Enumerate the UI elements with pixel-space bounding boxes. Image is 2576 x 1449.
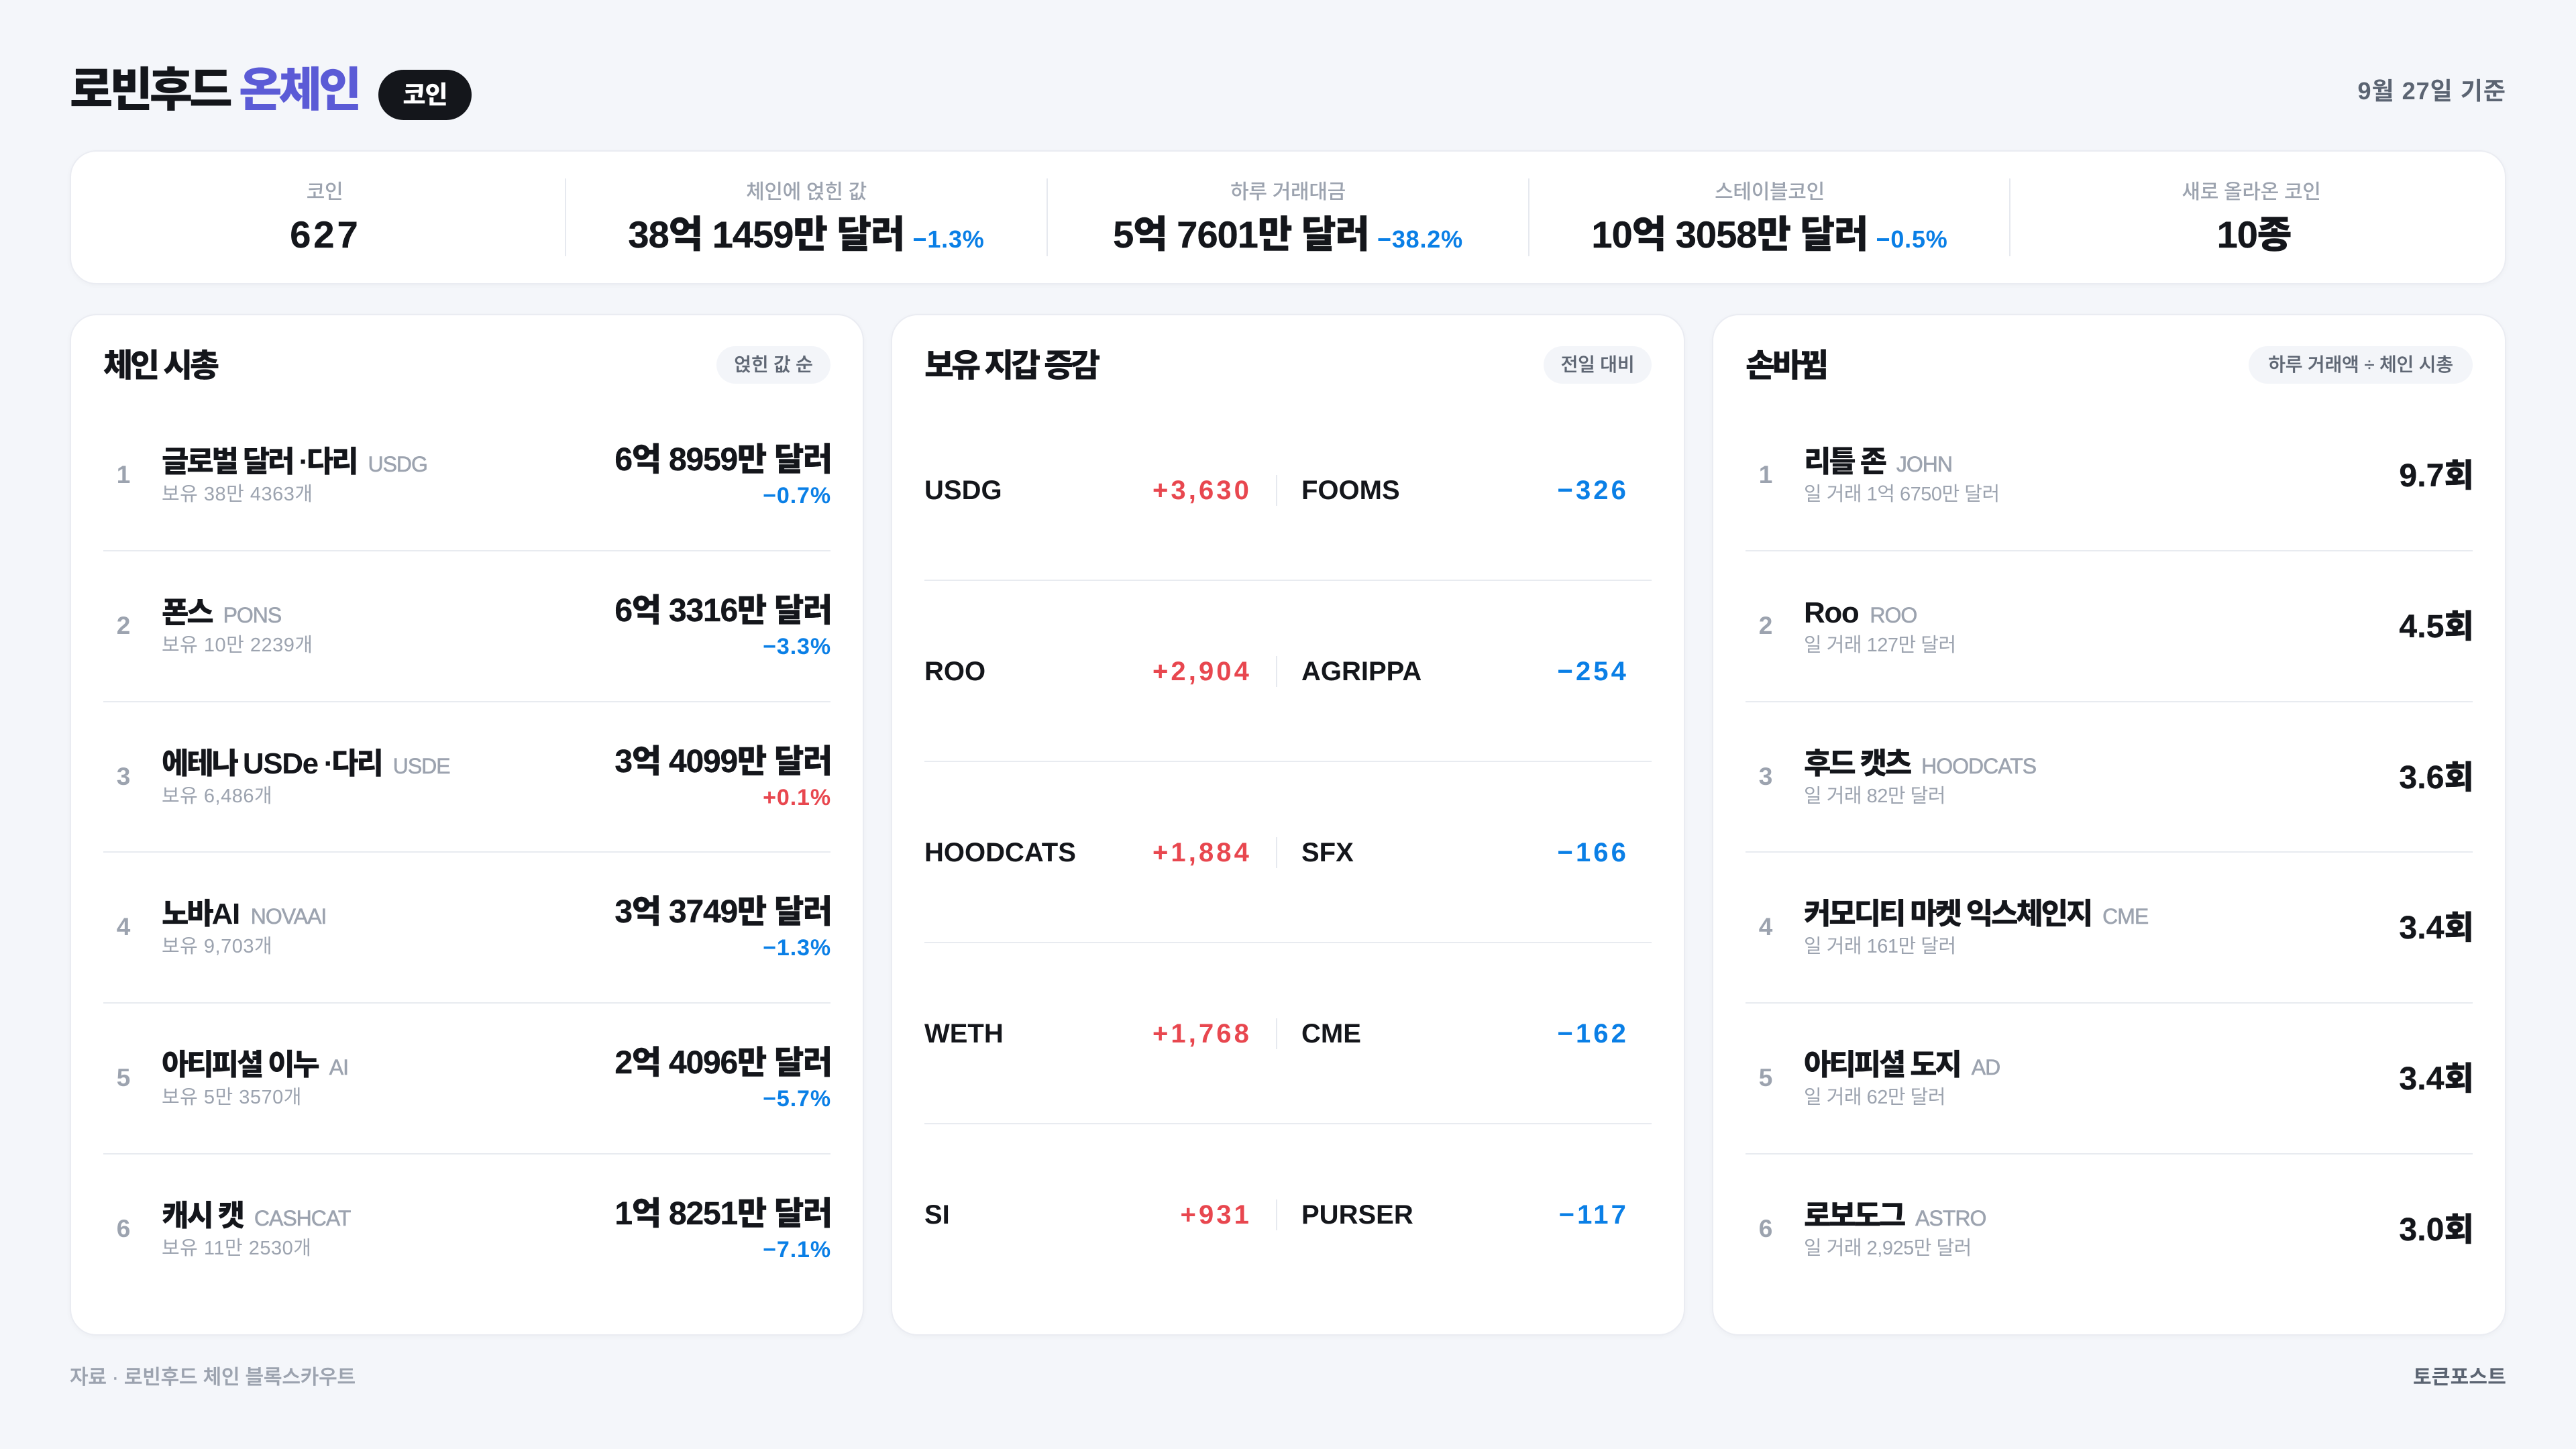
panel: summary stats: 하루 거래대금 xyxy=(1230,181,1346,203)
panel: summary stats: 5억 7601만 달러 −38.2% xyxy=(1113,213,1463,256)
panel: summary stats: 10종 xyxy=(2217,213,2291,256)
row 4: 4 xyxy=(117,913,130,941)
row 2: 2 xyxy=(117,612,130,639)
row 3 xyxy=(1746,747,2474,853)
row 6 xyxy=(1759,1199,2474,1259)
panel: summary stats: 스테이블코인 xyxy=(1715,181,1825,203)
row 2: Roo ROO xyxy=(1804,596,1917,629)
chip: sort order: 얹힌 값 순 xyxy=(734,354,813,375)
row 5: PURSER xyxy=(1301,1200,1413,1230)
row 1: +3,630 xyxy=(1152,475,1252,504)
row 1: 6억 8959만 달러 xyxy=(614,442,832,478)
row 4: 노바AI NOVAAI xyxy=(162,898,326,930)
stat: daily volume xyxy=(1113,181,1463,256)
panel: summary stats: 10억 3058만 달러 −0.5% xyxy=(1591,213,1948,256)
row 5: −5.7% xyxy=(763,1086,831,1112)
row 6: 보유 11만 2530개 xyxy=(162,1238,311,1259)
badge: coin: 코인 xyxy=(402,81,447,109)
row 5 xyxy=(1746,1049,2474,1155)
row 1: 9.7회 xyxy=(2399,458,2474,494)
row 2: 보유 10만 2239개 xyxy=(162,635,313,656)
panel: summary stats: 38억 1459만 달러 −1.3% xyxy=(628,213,985,256)
row 3: 후드 캣츠 HOODCATS xyxy=(1804,747,2036,780)
row 3: 3 xyxy=(1759,763,1772,790)
row 1 xyxy=(1746,445,2474,551)
row 2: 6억 3316만 달러 xyxy=(614,593,832,629)
row 5: 5 xyxy=(1759,1064,1772,1091)
row 5: −117 xyxy=(1559,1200,1629,1230)
stat: coins xyxy=(290,181,361,256)
row 2: AGRIPPA xyxy=(1301,657,1421,686)
row 5: 3.4회 xyxy=(2399,1061,2474,1097)
row 6: 6 xyxy=(1759,1215,1772,1242)
row 3: 3 xyxy=(117,763,130,790)
row 5: 일 거래 62만 달러 xyxy=(1804,1087,1945,1108)
row 3: 일 거래 82만 달러 xyxy=(1804,786,1945,807)
row 6: 일 거래 2,925만 달러 xyxy=(1804,1238,1972,1259)
row 3: −166 xyxy=(1558,838,1629,867)
stat: value locked xyxy=(628,181,985,256)
chip: sort order xyxy=(716,346,830,384)
panel: summary stats: 새로 올라온 코인 xyxy=(2182,181,2321,203)
row 4 xyxy=(924,1018,1652,1124)
stat: new coins xyxy=(2182,181,2321,256)
row 1: FOOMS xyxy=(1301,475,1400,504)
row 6: 캐시 캣 CASHCAT xyxy=(162,1199,350,1232)
row 3: SFX xyxy=(1301,838,1354,867)
panel: holder wallet change xyxy=(891,314,1685,1336)
row 1: −0.7% xyxy=(763,483,831,508)
row 4: CME xyxy=(1301,1019,1361,1049)
row 1: 보유 38만 4363개 xyxy=(162,484,313,505)
row 4: −1.3% xyxy=(763,935,831,961)
row 5 xyxy=(103,1045,832,1155)
row 5: 5 xyxy=(117,1064,130,1091)
row 5 xyxy=(924,1199,1629,1230)
stat: stablecoins xyxy=(1591,181,1948,256)
row 4: 일 거래 161만 달러 xyxy=(1804,936,1956,957)
row 6: 3.0회 xyxy=(2399,1212,2474,1248)
row 4: 보유 9,703개 xyxy=(162,936,272,957)
heading: 손바뀜 xyxy=(1746,348,1826,384)
footer: publisher: 토큰포스트 xyxy=(2413,1366,2506,1389)
footer: source: 자료 · 로빈후드 체인 블록스카우트 xyxy=(70,1366,356,1389)
row 3 xyxy=(924,837,1652,943)
heading: 보유 지갑 증감 xyxy=(924,348,1097,384)
chip: versus previous day xyxy=(1544,346,1652,384)
row 2: −254 xyxy=(1558,657,1629,686)
chip: versus previous day: 전일 대비 xyxy=(1561,354,1634,375)
row 1: −326 xyxy=(1558,475,1629,504)
row 4: WETH xyxy=(924,1019,1004,1049)
row 1 xyxy=(103,442,832,551)
chip: formula xyxy=(2249,346,2473,384)
row 2 xyxy=(1746,596,2474,702)
row 4: 커모디티 마켓 익스체인지 CME xyxy=(1804,898,2148,930)
panel: chain market cap xyxy=(70,314,864,1336)
row 3: HOODCATS xyxy=(924,838,1076,867)
badge: coin xyxy=(378,70,472,120)
row 2: 4.5회 xyxy=(2399,609,2474,645)
row 4 xyxy=(103,894,832,1004)
row 5: 2억 4096만 달러 xyxy=(614,1045,832,1081)
row 1: USDG xyxy=(924,475,1002,504)
heading: 체인 시총 xyxy=(103,348,217,384)
row 6: 1억 8251만 달러 xyxy=(614,1196,832,1232)
row 6 xyxy=(117,1196,832,1263)
row 4: 3억 3749만 달러 xyxy=(614,894,832,930)
row 1: 1 xyxy=(117,461,130,488)
title: 로빈후드 온체인 xyxy=(70,64,358,116)
row 4: −162 xyxy=(1558,1019,1629,1049)
row 4: +1,768 xyxy=(1152,1019,1252,1049)
row 5: 아티피셜 도지 AD xyxy=(1804,1049,2000,1081)
panel: summary stats xyxy=(70,150,2506,284)
row 2 xyxy=(103,593,832,702)
row 5: SI xyxy=(924,1200,950,1230)
row 6: 로보도그 ASTRO xyxy=(1804,1199,1986,1232)
row 3: +0.1% xyxy=(763,785,831,810)
row 4: 3.4회 xyxy=(2399,910,2474,946)
row 3: 에테나 USDe ·다리 USDE xyxy=(162,747,450,780)
row 5: 아티피셜 이누 AI xyxy=(162,1049,348,1081)
row 4 xyxy=(1746,898,2474,1004)
row 3: +1,884 xyxy=(1152,838,1252,867)
row 2: 2 xyxy=(1759,612,1772,639)
row 3: 3억 4099만 달러 xyxy=(614,744,832,780)
chip: formula: 하루 거래액 ÷ 체인 시총 xyxy=(2268,354,2453,375)
row 5: +931 xyxy=(1181,1200,1252,1230)
row 4: 4 xyxy=(1759,913,1772,941)
row 1 xyxy=(924,475,1652,581)
panel: summary stats: 코인 xyxy=(307,181,343,203)
row 2: 폰스 PONS xyxy=(162,596,281,629)
row 3: 3.6회 xyxy=(2399,760,2474,796)
row 2: 일 거래 127만 달러 xyxy=(1804,635,1956,656)
row 1: 리틀 존 JOHN xyxy=(1804,445,1952,478)
row 2: +2,904 xyxy=(1152,657,1252,686)
row 1: 1 xyxy=(1759,461,1772,488)
panel: summary stats: 627 xyxy=(290,213,361,256)
row 1: 글로벌 달러 ·다리 USDG xyxy=(162,445,427,478)
row 3 xyxy=(103,744,832,853)
row 6: −7.1% xyxy=(763,1237,831,1263)
row 2 xyxy=(924,656,1652,762)
panel: summary stats: 체인에 얹힌 값 xyxy=(746,181,867,203)
row 3: 보유 6,486개 xyxy=(162,786,272,807)
row 2: ROO xyxy=(924,657,985,686)
row 6: 6 xyxy=(117,1215,130,1242)
row 2: −3.3% xyxy=(763,634,831,659)
panel: hot money turnover xyxy=(1712,314,2506,1336)
row 5: 보유 5만 3570개 xyxy=(162,1087,302,1108)
date: 9월 27일 기준 xyxy=(2357,77,2506,105)
row 1: 일 거래 1억 6750만 달러 xyxy=(1804,484,2000,505)
